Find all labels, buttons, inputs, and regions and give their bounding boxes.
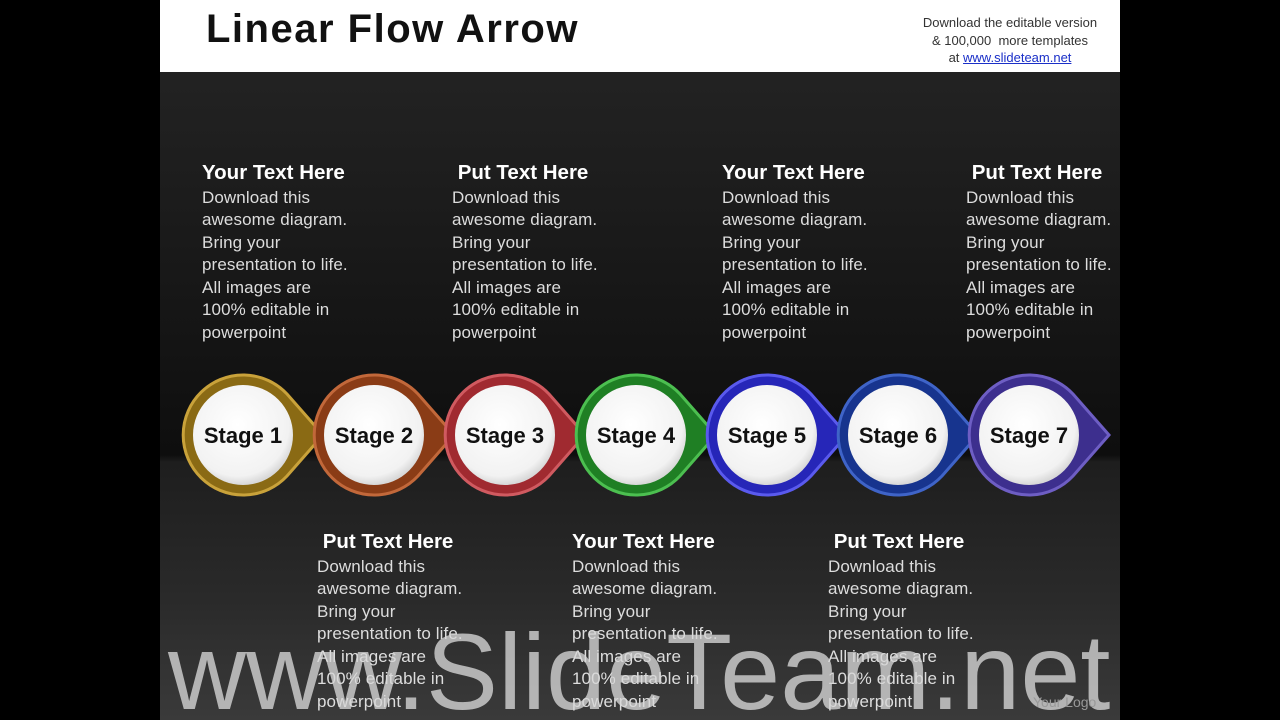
- text block 6: powerpoint: [572, 692, 656, 710]
- text block 7: awesome diagram.: [828, 579, 973, 598]
- text block 1: presentation to life.: [202, 255, 348, 274]
- stage 4: [576, 375, 716, 495]
- text block 6: Your Text Here: [572, 530, 715, 553]
- text block 2: 100% editable in: [452, 300, 579, 319]
- text block 6: awesome diagram.: [572, 579, 717, 598]
- text block 2: All images are: [452, 278, 561, 296]
- text block 3: [722, 161, 868, 342]
- download note: Download the editable version: [923, 15, 1097, 30]
- text block 1: Your Text Here: [202, 161, 345, 184]
- stage 4: Stage 4: [597, 423, 676, 448]
- text block 7: Put Text Here: [834, 530, 964, 553]
- text block 5: Bring your: [317, 602, 395, 620]
- download note: & 100,000 more templates: [932, 32, 1088, 48]
- text block 4: presentation to life.: [966, 255, 1112, 274]
- text block 2: [452, 161, 598, 342]
- stage 5: Stage 5: [728, 423, 806, 448]
- text block 6: 100% editable in: [572, 669, 699, 688]
- text block 1: All images are: [202, 278, 311, 296]
- text block 7: Download this: [828, 556, 936, 576]
- text block 4: awesome diagram.: [966, 210, 1111, 229]
- stage 6: [838, 375, 978, 495]
- stage 2: [314, 375, 454, 495]
- download note: [923, 15, 1097, 65]
- text block 1: [202, 161, 348, 342]
- text block 6: presentation to life.: [572, 624, 718, 643]
- text block 4: powerpoint: [966, 322, 1050, 342]
- text block 3: Download this: [722, 188, 830, 206]
- text block 7: All images are: [828, 646, 937, 666]
- text block 2: powerpoint: [452, 322, 536, 342]
- text block 2: presentation to life.: [452, 255, 598, 274]
- text block 3: powerpoint: [722, 322, 806, 342]
- text block 5: 100% editable in: [317, 669, 444, 688]
- stage 3: [445, 375, 585, 495]
- text block 1: Download this: [202, 188, 310, 206]
- text block 3: All images are: [722, 278, 831, 296]
- title: Linear Flow Arrow: [206, 7, 579, 51]
- text block 3: presentation to life.: [722, 255, 868, 274]
- text block 2: Bring your: [452, 232, 530, 252]
- text block 1: 100% editable in: [202, 300, 329, 319]
- logo placeholder: Your Logo: [1033, 694, 1096, 710]
- text block 5: Download this: [317, 556, 425, 576]
- text block 6: All images are: [572, 646, 681, 666]
- text block 1: powerpoint: [202, 322, 286, 342]
- text block 7: [828, 530, 974, 710]
- text block 5: presentation to life.: [317, 624, 463, 643]
- stage 1: [183, 375, 323, 495]
- text block 6: Bring your: [572, 602, 650, 620]
- text block 7: presentation to life.: [828, 624, 974, 643]
- text block 5: [317, 530, 463, 710]
- text block 2: awesome diagram.: [452, 210, 597, 229]
- text block 1: awesome diagram.: [202, 210, 347, 229]
- text block 5: Put Text Here: [323, 530, 453, 553]
- stage 6: Stage 6: [859, 423, 937, 448]
- download note: at www.slideteam.net: [949, 50, 1071, 65]
- header bar: [160, 0, 1120, 72]
- text block 3: Bring your: [722, 232, 800, 252]
- text block 4: Download this: [966, 188, 1074, 206]
- text block 7: Bring your: [828, 602, 906, 620]
- text block 4: 100% editable in: [966, 300, 1093, 319]
- text block 4: Bring your: [966, 232, 1044, 252]
- stage 3: Stage 3: [466, 423, 544, 448]
- stage 2: Stage 2: [335, 423, 413, 448]
- text block 7: 100% editable in: [828, 669, 955, 688]
- stage 5: [707, 375, 847, 495]
- text block 3: Your Text Here: [722, 161, 865, 184]
- text block 7: powerpoint: [828, 692, 912, 710]
- text block 2: Download this: [452, 188, 560, 206]
- text block 5: All images are: [317, 646, 426, 666]
- stage 1: Stage 1: [204, 423, 282, 448]
- text block 3: awesome diagram.: [722, 210, 867, 229]
- stage 7: [969, 375, 1109, 495]
- text block 6: Download this: [572, 556, 680, 576]
- stage 7: Stage 7: [990, 423, 1068, 448]
- text block 5: awesome diagram.: [317, 579, 462, 598]
- text block 4: [966, 161, 1112, 342]
- text block 5: powerpoint: [317, 692, 401, 710]
- text block 4: Put Text Here: [972, 161, 1102, 184]
- stage flow: [182, 374, 1111, 496]
- text block 6: [572, 530, 718, 710]
- text block 3: 100% editable in: [722, 300, 849, 319]
- text block 1: Bring your: [202, 232, 280, 252]
- text block 4: All images are: [966, 278, 1075, 296]
- text block 2: Put Text Here: [458, 161, 588, 184]
